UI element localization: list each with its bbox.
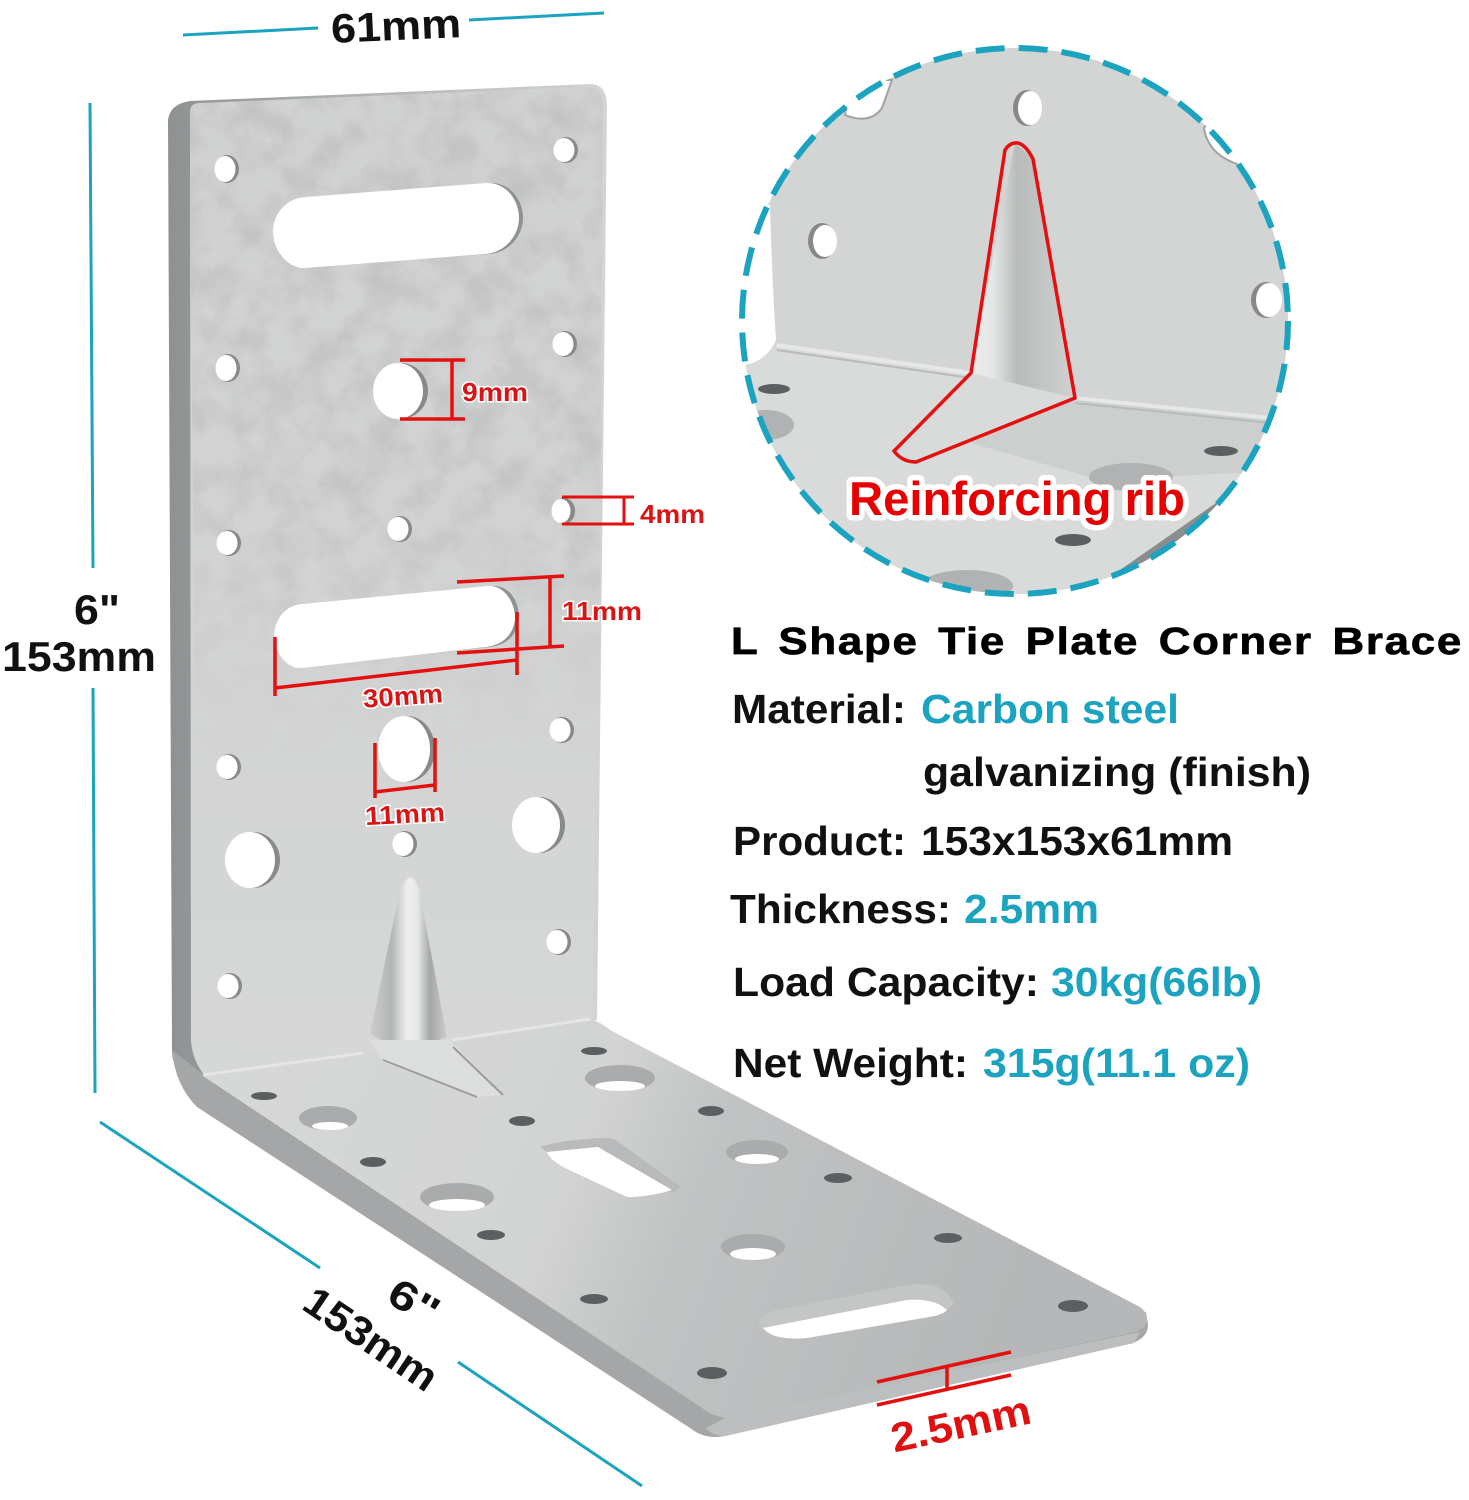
spec: material: galvanizing (finish) [923, 749, 1311, 795]
red dimension: 30mm [275, 612, 517, 714]
spec: thickness: 2.5mm [964, 886, 1099, 932]
red dimension: 9mm [400, 360, 528, 419]
dimension: 153mm depth: 6" [380, 1269, 448, 1335]
dimension: 153mm height: 153mm [2, 633, 156, 680]
base plate thickness edge [172, 1050, 1148, 1437]
base plate [172, 1019, 1148, 1437]
detail floor [794, 482, 1063, 594]
red dimension: 11mm hole [364, 738, 446, 831]
near base slot [540, 1138, 681, 1197]
spec: material [732, 686, 1311, 795]
bracket illustration [168, 84, 1148, 1437]
red dimension: 30mm: 30mm [362, 678, 444, 714]
spec: net weight: 315g(11.1 oz) [983, 1040, 1250, 1086]
product title: L Shape Tie Plate Corner Brace [731, 621, 1463, 663]
red dimension: 11mm hole: 11mm [364, 797, 446, 831]
upper slot [273, 183, 523, 268]
base rib [370, 1040, 503, 1097]
detail lower-right edge [1095, 491, 1300, 600]
dashed circle [742, 48, 1288, 594]
spec: load capacity: Load Capacity: [733, 959, 1039, 1005]
dimension: 61mm width: 61mm [330, 0, 462, 52]
red dimension: 11mm slot height [457, 576, 642, 653]
detail fold lines [777, 345, 1280, 419]
spec: thickness [730, 886, 1099, 932]
far base slot [758, 1284, 953, 1339]
vertical plate holes [214, 138, 574, 998]
spec: material: Material: [732, 686, 906, 732]
spec: thickness: Thickness: [730, 886, 951, 932]
red dimension: 2.5mm: 2.5mm [887, 1387, 1035, 1461]
rib outline [894, 143, 1075, 462]
base holes large openings [312, 1081, 779, 1260]
red dimension: 4mm: 4mm [640, 499, 705, 529]
dimension: 61mm width [183, 0, 604, 52]
vertical rib [370, 877, 447, 1052]
spec: load capacity [733, 959, 1262, 1005]
vertical plate hole rims [215, 137, 578, 999]
red dimension: 2.5mm [877, 1352, 1035, 1461]
spec: material: Carbon steel [921, 686, 1179, 732]
spec: load capacity: 30kg(66lb) [1051, 959, 1262, 1005]
dimension: 153mm height: 6" [74, 586, 120, 633]
dimension: 153mm depth [100, 1122, 642, 1486]
red dimension: 4mm [562, 497, 705, 529]
callout: reinforcing rib detail [738, 45, 1300, 602]
fold line highlight [203, 1019, 590, 1075]
spec: product size [733, 818, 1233, 864]
vertical plate [168, 84, 610, 1080]
dimension: 153mm height [2, 103, 156, 1093]
callout label: Reinforcing rib [849, 472, 1185, 525]
spec: net weight [733, 1040, 1250, 1086]
red dimension: 9mm: 9mm [462, 377, 528, 407]
dimension: 153mm depth: 153mm [295, 1277, 447, 1401]
base holes large rims [299, 1065, 788, 1260]
spec: net weight: Net Weight: [733, 1040, 968, 1086]
detail white cut-outs [742, 205, 776, 365]
base holes small [251, 1047, 1088, 1379]
spec: product size: 153x153x61mm [921, 818, 1233, 864]
detail holes [808, 90, 1281, 318]
spec: product size: Product: [733, 818, 906, 864]
rib shading [972, 144, 1062, 395]
red dimension: 11mm slot height: 11mm [562, 596, 642, 626]
middle slot [274, 586, 519, 668]
